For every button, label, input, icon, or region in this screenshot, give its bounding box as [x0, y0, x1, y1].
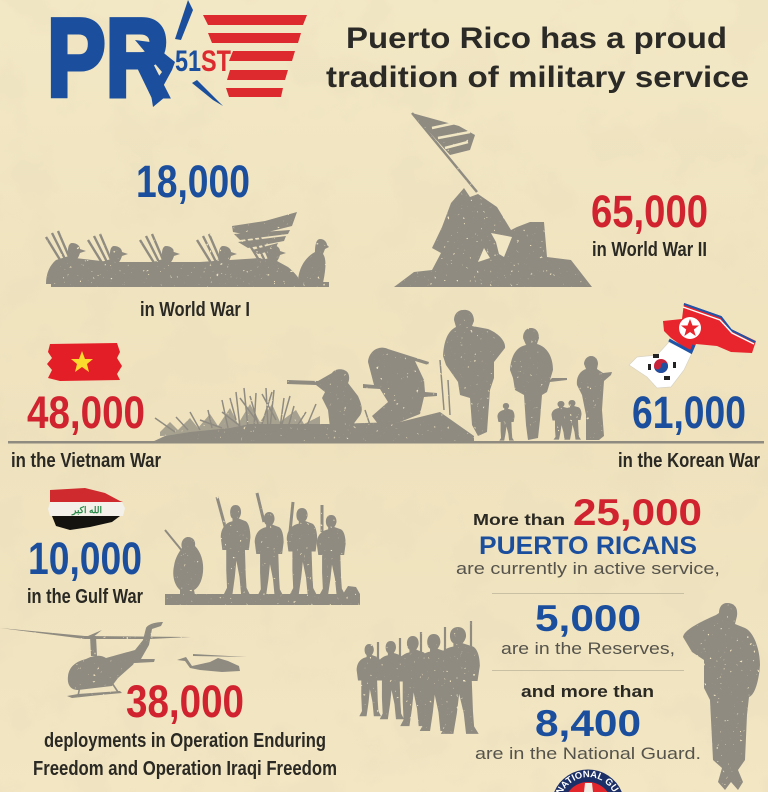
- logo star strokes: [135, 0, 223, 107]
- stat: Gulf War: [27, 533, 143, 608]
- crouching soldier: [363, 348, 437, 424]
- stat: active service: are currently in active service,: [456, 559, 720, 578]
- illustration: small helicopter: [177, 654, 247, 672]
- rear guard soldier: [577, 356, 612, 440]
- kneeling rifleman: [287, 369, 362, 428]
- stat: Vietnam War: 48,000: [27, 387, 145, 438]
- stat: active service: [456, 492, 720, 578]
- small distant soldiers: [497, 403, 515, 441]
- stat: World War II: [591, 186, 708, 261]
- illustration: soldiers in grass on ground line: [8, 310, 764, 444]
- illustration: Iwo Jima flag raising: [394, 113, 592, 287]
- north korea map: [663, 303, 756, 353]
- stat: World War II: in World War II: [592, 239, 707, 261]
- stat: World War II: 65,000: [591, 186, 708, 237]
- stat: reserves: [501, 598, 675, 658]
- stat: national guard: are in the National Guard.: [475, 744, 701, 763]
- title: tradition of military service: [326, 61, 749, 94]
- standing soldier: [510, 328, 567, 440]
- stat: Korean War: 61,000: [632, 387, 746, 438]
- logo 51ST label: 51ST: [175, 45, 231, 78]
- stat: deployments: Freedom and Operation Iraqi Freedom: [33, 758, 337, 780]
- illustration: large helicopter: [0, 622, 191, 698]
- stat: national guard: 8,400: [535, 703, 641, 744]
- stat: Vietnam War: [11, 387, 161, 472]
- stat: deployments: 38,000: [126, 676, 244, 727]
- stat: reserves: are in the Reserves,: [501, 639, 675, 658]
- illustration: Gulf War soldiers: [165, 493, 360, 605]
- south korea map: [629, 342, 692, 388]
- title: [326, 22, 749, 94]
- stat: Gulf War: 10,000: [28, 533, 142, 584]
- stat: active service: 25,000: [573, 492, 702, 533]
- soldier running: [443, 310, 505, 436]
- logo stripes: [203, 15, 307, 97]
- flag inscription: الله اكبر: [71, 505, 102, 516]
- title: Puerto Rico has a proud: [346, 22, 727, 55]
- seal lettering: NATIONAL GUARD: [556, 770, 619, 792]
- stat: Korean War: [618, 387, 760, 472]
- stat: active service: PUERTO RICANS: [479, 532, 697, 560]
- stat: World War I: [136, 156, 250, 321]
- stat: World War I: 18,000: [136, 156, 250, 207]
- stat: national guard: [475, 682, 701, 763]
- ground line: [8, 441, 764, 444]
- logo: PR 51ST: [47, 0, 307, 120]
- flag: Vietnam: [47, 343, 122, 381]
- stat: reserves: 5,000: [535, 598, 641, 639]
- stat: World War I: in World War I: [140, 299, 250, 321]
- logo letters PR: PR: [47, 0, 169, 120]
- north flag bands: [684, 304, 755, 342]
- grass field: [152, 310, 612, 442]
- illustration: saluting soldier: [683, 603, 760, 790]
- illustration: marching soldiers: [357, 621, 480, 734]
- stat: Vietnam War: in the Vietnam War: [11, 450, 161, 472]
- illustration: World War I soldiers with flag: [46, 212, 329, 287]
- flag: Korea map: [629, 303, 756, 388]
- stat: deployments: deployments in Operation Enduring: [44, 730, 326, 752]
- north flag star: [679, 317, 701, 339]
- flag: Iraq: [48, 488, 125, 530]
- stat: national guard: and more than: [521, 682, 654, 701]
- stat: active service: More than: [473, 512, 565, 529]
- taegeuk: [654, 359, 668, 373]
- stat: Gulf War: in the Gulf War: [27, 586, 143, 608]
- trigrams: [648, 354, 676, 380]
- stat: deployments: [33, 676, 337, 780]
